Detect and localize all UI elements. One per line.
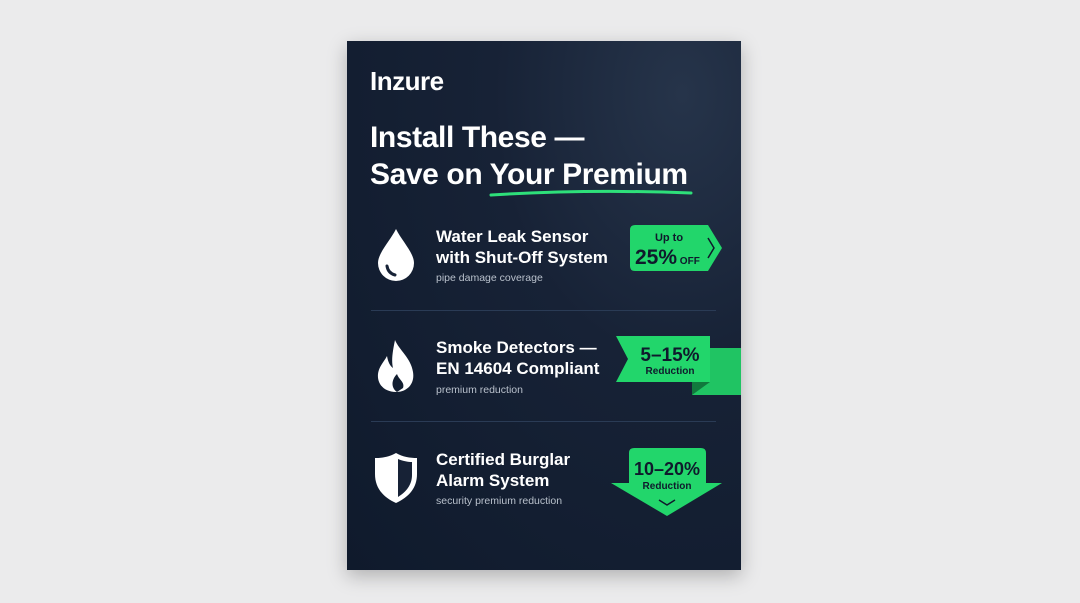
badge: 5-15% reduction ribbon: Reduction [646, 366, 694, 377]
row 3: burglar alarm: security premium reduction [436, 495, 562, 507]
badge: 10-20% reduction arrow [611, 448, 722, 516]
text block: Certified Burglar [436, 450, 570, 469]
title: Save on Your Premium [370, 158, 688, 191]
badge: 5-15% reduction ribbon [616, 336, 741, 395]
text block [436, 338, 600, 378]
title underline [490, 190, 692, 196]
text block [436, 227, 608, 266]
text block: EN 14604 Compliant [436, 358, 599, 378]
badge: 10-20% reduction arrow: Reduction [643, 481, 691, 492]
icon: flame [378, 340, 414, 392]
row 2: smoke detectors: premium reduction [436, 384, 523, 396]
badge: up to 25% off: 25% OFF [635, 246, 700, 269]
row 1: water leak sensor: pipe damage coverage [436, 272, 543, 284]
text block [436, 450, 570, 490]
badge: 10-20% reduction arrow: 10–20% [634, 459, 700, 479]
icon: water drop [378, 229, 414, 281]
badge: 5-15% reduction ribbon: 5–15% [640, 345, 700, 366]
badge: up to 25% off: Up to [655, 232, 683, 244]
text block: Alarm System [436, 470, 549, 490]
logo: Inzure [370, 66, 444, 96]
text block: with Shut-Off System [436, 248, 608, 266]
icon: shield [375, 453, 417, 503]
row 1: water leak sensor [378, 225, 722, 284]
title: Install These — [370, 121, 584, 154]
poster [347, 41, 741, 570]
title [370, 121, 688, 191]
row 3: burglar alarm [375, 448, 722, 516]
row 2: smoke detectors [378, 336, 741, 396]
text block: Water Leak Sensor [436, 227, 588, 246]
badge: up to 25% off [630, 225, 722, 271]
text block: Smoke Detectors — [436, 338, 597, 357]
